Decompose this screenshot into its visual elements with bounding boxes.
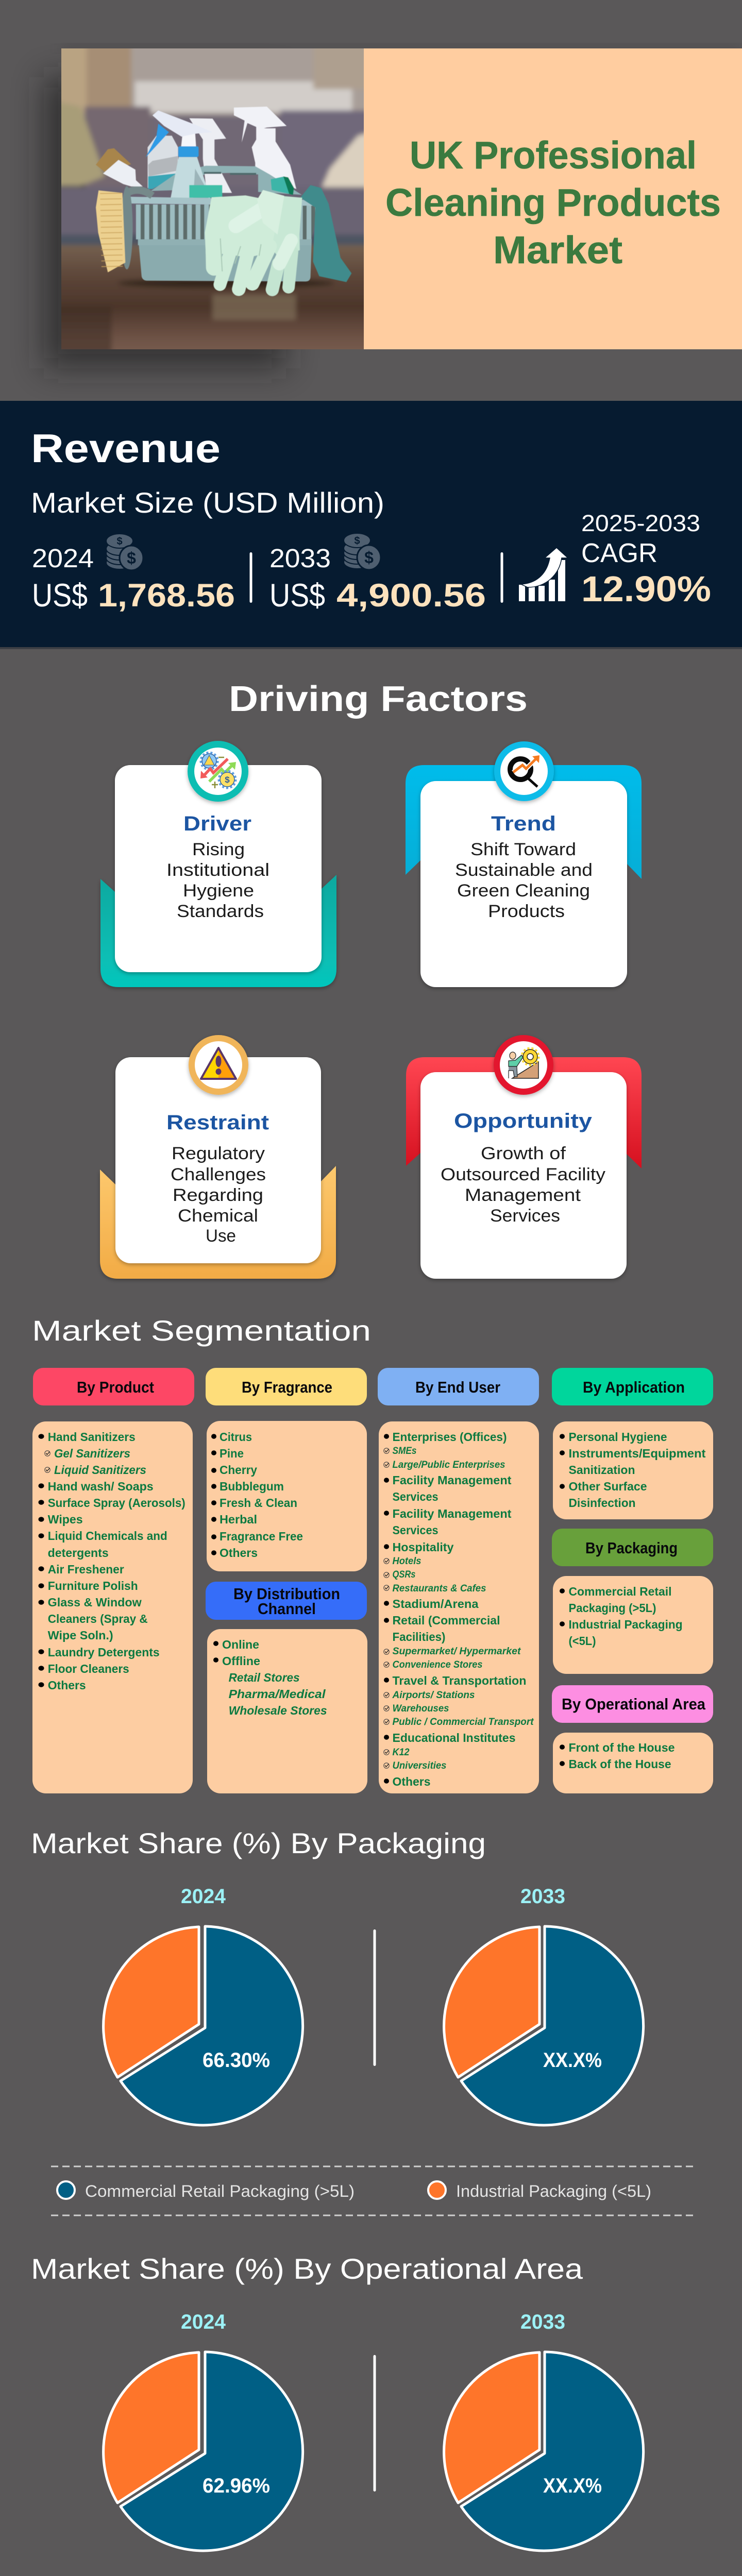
brush [127,190,153,196]
list: end user items: Educational Institutes [393,1731,515,1744]
list: distribution items [207,1629,367,1793]
panel: restraint [100,1035,336,1279]
list: fragrance items: Others [220,1546,258,1560]
list: fragrance items: Fresh & Clean [220,1496,297,1510]
text: driver body: Standards [177,902,264,921]
list: product items: Liquid Sanitizers [54,1463,146,1477]
list: end user items: Convenience Stores [393,1659,482,1670]
list: end user items: Facilities) [393,1630,445,1643]
text: trend body: Products [488,902,565,921]
list: distribution items: Pharma/Medical [229,1687,326,1701]
list: product items: detergents [48,1546,109,1560]
text: restraint body: Use [206,1226,236,1246]
left glove [205,195,277,258]
title: Market [493,228,622,272]
chart: operational area 2033 pie: 2033 [520,2311,565,2333]
list: end user items: Services [393,1523,438,1537]
header: by packaging: By Packaging [585,1539,678,1557]
text: restraint body: Regulatory [172,1144,265,1163]
list: end user items: SMEs [393,1446,416,1456]
list: fragrance items: Pine [220,1447,244,1460]
list: fragrance items: Cherry [220,1463,257,1477]
stat: CAGR: CAGR [581,538,657,568]
list: fragrance items: Fragrance Free [220,1530,303,1543]
list: packaging items: (<5L) [569,1634,596,1648]
header: by operational area: By Operational Area [562,1695,706,1713]
heading: driving factors: Driving Factors [229,679,528,719]
back left bottle [147,135,178,188]
list: end user items: Public / Commercial Transport [393,1717,534,1727]
panel: opportunity [406,1035,642,1279]
list: fragrance items [207,1421,367,1571]
list: distribution items: Offline [222,1654,260,1668]
list: end user items [379,1421,539,1793]
header: by distribution channel: By Distribution [233,1585,340,1603]
stat: 2024 [32,544,235,614]
heading: market share by operational area: Market Share (%) By Operational Area [31,2252,583,2285]
header: by end user [378,1368,539,1405]
list: end user items: Large/Public Enterprises [393,1460,505,1470]
list: distribution items: Wholesale Stores [229,1704,327,1717]
heading: revenue: Revenue [31,426,221,471]
heading: driver: Driver [183,812,251,835]
icon: opportunity [494,1035,553,1095]
icon: coins 2024: $ [127,549,136,567]
panel: by operational area [552,1685,713,1793]
panel: trend [406,741,642,987]
icon: driver [188,741,248,802]
list: application items: Disinfection [569,1496,636,1510]
title: Cleaning Products [385,181,721,224]
back right spray bottle [234,107,296,189]
panel: driver [100,741,336,987]
stat: 2033: 4,900.56 [336,578,486,614]
cloth [300,185,351,282]
icon: coins 2024: $ [116,536,123,547]
divider [373,1929,376,2066]
text: market size: Market Size (USD Million) [31,486,384,519]
header: by packaging [552,1529,713,1566]
header: by fragrance [206,1368,367,1405]
icon: restraint [189,1035,248,1095]
list: product items: Gel Sanitizers [54,1447,130,1460]
list: end user items: Facility Management [393,1507,512,1520]
title block [364,48,742,349]
list: distribution items: Retail Stores [229,1671,300,1684]
basket [138,234,312,281]
heading: market segmentation: Market Segmentation [32,1314,371,1347]
header: by distribution channel: Channel [258,1600,316,1618]
list: product items: Glass & Window [48,1596,142,1609]
title: UK Professional [410,133,697,177]
list: end user items: Airports/ Stations [392,1690,475,1701]
list: product items: Hand wash/ Soaps [48,1480,154,1493]
list: product items: Wipe Soln.) [48,1629,113,1642]
legend: packaging: Industrial Packaging (<5L) [456,2182,651,2200]
list: operational area items [553,1733,713,1793]
header: by end user: By End User [415,1378,500,1396]
text: trend body: Sustainable and [455,860,593,880]
header: by operational area [552,1685,713,1723]
list: packaging items [553,1576,713,1674]
heading: opportunity: Opportunity [454,1110,593,1132]
list: end user items: Enterprises (Offices) [393,1430,507,1444]
icon: coins 2024 [106,534,143,570]
back middle spray bottle [189,118,232,193]
header: by application [552,1368,713,1405]
icon: trend [494,741,554,801]
list: end user items: Supermarket/ Hypermarket [393,1646,521,1657]
list: end user items: Warehouses [393,1703,449,1714]
list: product items: Others [48,1679,86,1692]
heading: market share by packaging: Market Share (%) By Packaging [31,1827,486,1859]
list: product items: Surface Spray (Aerosols) [48,1496,185,1510]
header: by product: By Product [77,1378,154,1396]
chart: operational area 2024 pie: 62.96% [203,2475,270,2497]
text: restraint body [171,1144,266,1246]
icon: coins 2033: $ [364,548,374,567]
divider [373,2355,376,2492]
list: fragrance items: Bubblegum [220,1480,284,1493]
stat: 2033: US$ [269,578,325,614]
list: product items: Furniture Polish [48,1579,138,1592]
icon: coins 2033: $ [354,535,360,547]
list: product items: Wipes [48,1513,83,1526]
stat: 2024: 1,768.56 [98,578,235,614]
list: end user items: Restaurants & Cafes [393,1583,486,1594]
text: opportunity body: Services [490,1206,560,1226]
list: end user items: Stadium/Arena [393,1597,479,1611]
list: product items: Cleaners (Spray & [48,1612,148,1625]
list: product items: Liquid Chemicals and [48,1529,167,1543]
list: fragrance items: Herbal [220,1513,257,1526]
heading: trend: Trend [491,812,556,835]
panel: by end user [378,1368,539,1793]
panel: by fragrance [206,1368,367,1571]
title [385,133,721,272]
text: trend body: Shift Toward [470,840,576,859]
list: distribution items: Online [222,1638,259,1651]
list: application items: Personal Hygiene [569,1430,667,1444]
text: driver body [166,840,269,921]
list: end user items: Facility Management [393,1473,512,1487]
text: restraint body: Challenges [171,1165,266,1184]
list: end user items: QSRs [393,1569,415,1580]
stat: CAGR: 2025-2033 [581,510,700,536]
text: driver body: Hygiene [183,881,254,901]
text: opportunity body: Growth of [481,1144,566,1163]
list: application items: Other Surface [569,1480,647,1493]
chart: operational area 2033 pie [444,2311,644,2551]
chart: packaging 2033 pie: 2033 [520,1885,565,1908]
panel: revenue band [0,401,742,649]
text: restraint body: Chemical [178,1206,258,1226]
panel: hero banner [44,41,742,368]
chart: operational area 2033 pie: XX.X% [543,2475,602,2497]
list: operational area items: Back of the House [569,1757,671,1771]
stat: 2033: 2033 [269,544,331,573]
right glove [273,196,303,255]
list: application items: Instruments/Equipment [569,1447,706,1460]
divider [249,552,252,603]
stat: CAGR: 12.90% [581,569,711,609]
list: end user items: Services [393,1490,438,1503]
text: opportunity body: Outsourced Facility [441,1165,605,1184]
basket handle [151,166,302,195]
stat: 2024: 2024 [32,544,94,573]
panel: by application [552,1368,713,1519]
chart: packaging 2024 pie: 2024 [181,1885,226,1908]
header: by application: By Application [583,1378,685,1396]
text: trend body [455,840,593,921]
list: product items: Laundry Detergents [48,1646,160,1659]
list: application items [553,1421,713,1519]
list: end user items: Universities [393,1760,446,1771]
chart: operational area 2024 pie [104,2311,303,2551]
header: by distribution channel [206,1582,367,1620]
stat: 2024: US$ [32,578,88,614]
list: end user items: Hospitality [393,1540,454,1554]
stat: 2033 [269,544,486,614]
chart: packaging 2033 pie [444,1885,644,2125]
text: driver body: Institutional [166,860,269,880]
chart: packaging 2024 pie [104,1885,303,2125]
header: by product [33,1368,194,1405]
stat: CAGR [581,510,711,609]
list: product items: Hand Sanitizers [48,1430,136,1444]
list: end user items: Others [393,1775,431,1788]
list: end user items: Travel & Transportation [393,1674,527,1687]
chart: packaging 2033 pie: XX.X% [543,2049,602,2072]
heading: restraint: Restraint [166,1111,269,1134]
header: by fragrance: By Fragrance [242,1378,332,1396]
list: end user items: K12 [393,1747,410,1758]
text: opportunity body [441,1144,605,1226]
list: product items [32,1421,193,1793]
list: operational area items: Front of the House [569,1741,675,1754]
legend: packaging [51,2166,694,2215]
list: packaging items: Packaging (>5L) [569,1601,656,1615]
image: cleaning basket photo [54,41,372,358]
list: end user items: Retail (Commercial [393,1614,500,1627]
chart: packaging 2024 pie: 66.30% [203,2049,270,2072]
right sponge [271,176,294,195]
text: restraint body: Regarding [173,1185,263,1205]
text: opportunity body: Management [465,1185,581,1205]
divider [501,552,503,603]
icon: coins 2033 [344,533,381,570]
panel: by product [32,1368,194,1793]
text: trend body: Green Cleaning [457,881,590,901]
text: driver body: Rising [192,840,245,859]
list: fragrance items: Citrus [220,1430,252,1444]
icon: growth chart [519,548,568,601]
list: application items: Sanitization [569,1463,635,1477]
list: product items: Air Freshener [48,1563,124,1576]
list: product items: Floor Cleaners [48,1662,129,1675]
panel: by packaging [552,1529,713,1674]
chart: operational area 2024 pie: 2024 [181,2311,226,2333]
icon: driver: $ [225,775,230,785]
list: packaging items: Commercial Retail [569,1585,672,1598]
clear spray bottle [171,157,211,199]
list: end user items: Hotels [393,1556,421,1567]
panel: by distribution channel [206,1582,367,1793]
legend: packaging: Commercial Retail Packaging (>5L) [85,2182,355,2200]
list: packaging items: Industrial Packaging [569,1618,682,1631]
